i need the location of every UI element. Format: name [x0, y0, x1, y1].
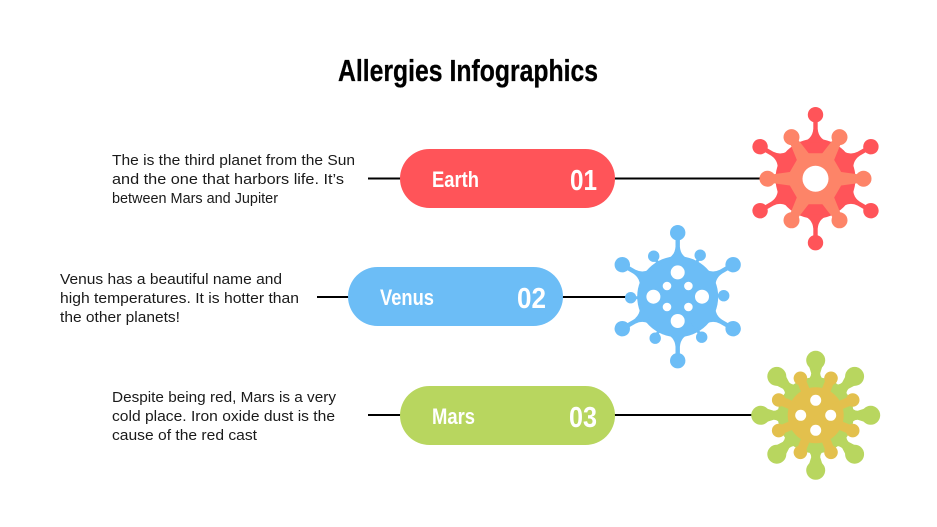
pill: Mars: Mars — [432, 404, 475, 429]
pill: Venus: Venus — [380, 285, 434, 310]
pill: Venus: 02 — [517, 283, 546, 315]
text block: Venus description — [60, 272, 299, 326]
title: Allergies Infographics — [338, 53, 598, 88]
text block: Venus description: the other planets! — [60, 310, 180, 326]
pill: Mars: 03 — [569, 402, 597, 434]
row: Venus — [60, 225, 747, 368]
icon: green virus — [751, 351, 880, 480]
icon: blue virus — [608, 225, 747, 368]
row: Mars — [112, 351, 880, 480]
row: Earth — [112, 107, 885, 250]
text block: Earth description — [112, 153, 355, 207]
icon: red virus — [746, 107, 885, 250]
text block: Venus description: Venus has a beautiful name and — [60, 272, 282, 288]
text block: Earth description: The is the third planet from the Sun — [112, 153, 355, 169]
pill: Earth: Earth — [432, 167, 479, 192]
text block: Mars description — [112, 390, 337, 444]
connector: Mars left — [368, 414, 402, 416]
pill: Venus — [348, 267, 563, 326]
connector: Venus left — [317, 296, 350, 298]
connector: Mars right — [613, 414, 756, 416]
connector: Earth right — [613, 178, 762, 180]
connector: Earth left — [368, 178, 402, 180]
pill: Earth — [400, 149, 615, 208]
pill: Earth: 01 — [570, 165, 597, 197]
text block: Mars description: cold place. Iron oxide dust is the — [112, 409, 335, 425]
text block: Mars description: Despite being red, Mars is a very — [112, 390, 337, 406]
text block: Earth description: between Mars and Jupiter — [112, 191, 278, 207]
connector: Venus right — [561, 296, 628, 298]
pill: Mars — [400, 386, 615, 445]
text block: Venus description: high temperatures. It is hotter than — [60, 291, 299, 307]
text block: Earth description: and the one that harbors life. It’s — [112, 172, 344, 188]
text block: Mars description: cause of the red cast — [112, 428, 257, 444]
